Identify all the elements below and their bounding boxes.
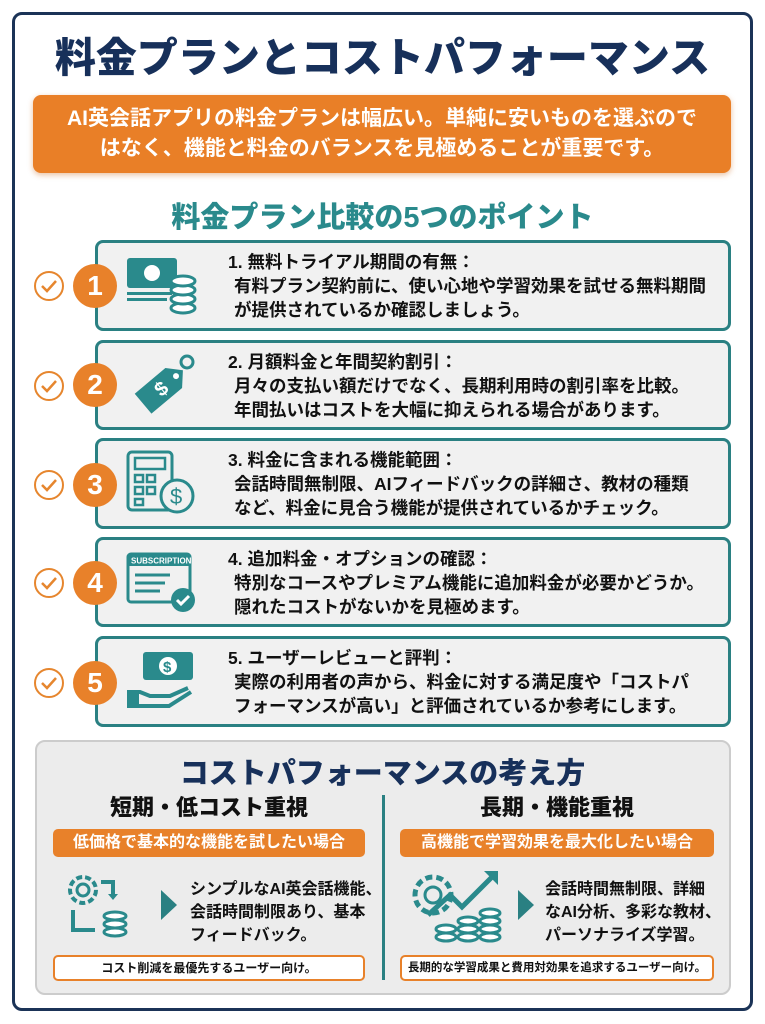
title: 料金プランとコストパフォーマンス [55, 35, 710, 81]
right note: 長期的な学習成果と費用対効果を追求するユーザー向け。 [408, 962, 706, 974]
card 5: 5. ユーザーレビューと評判： [228, 648, 457, 668]
check 1 [34, 271, 64, 301]
icon: price tag [134, 354, 194, 414]
number 2: 2 [87, 369, 103, 400]
icon: hand money [127, 652, 193, 708]
left orange label: 低価格で基本的な機能を試したい場合 [73, 834, 345, 851]
arrow [518, 890, 534, 920]
check 2 [34, 371, 64, 401]
card 1: が提供されているか確認しましょう。 [234, 300, 530, 320]
subtitle: 料金プラン比較の5つのポイント [171, 202, 594, 234]
number 5: 5 [87, 667, 103, 698]
icon: calculator: $ [170, 484, 182, 509]
card 5 [95, 636, 731, 727]
right text: パーソナライズ学習。 [545, 927, 705, 944]
icon: price tag: $ [150, 377, 173, 401]
card 5: フォーマンスが高い」と評価されているか参考にします。 [234, 696, 686, 716]
heading: cost performance: コストパフォーマンスの考え方 [180, 758, 585, 790]
left column [53, 795, 382, 981]
right text: 会話時間無制限、詳細 [545, 881, 705, 898]
card 3: 3. 料金に含まれる機能範囲： [228, 450, 457, 470]
divider [382, 795, 385, 980]
check 5 [34, 668, 64, 698]
left text: 会話時間制限あり、基本 [190, 904, 365, 921]
card 2: 年間払いはコストを大幅に抑えられる場合があります。 [234, 400, 670, 420]
check 3 [34, 470, 64, 500]
number 2 [73, 363, 117, 407]
left orange label [53, 829, 365, 857]
check 4 [34, 568, 64, 598]
icon: subscription: SUBSCRIPTION [131, 556, 192, 566]
right heading: 長期・機能重視 [480, 795, 634, 820]
icon: gear cycle [68, 875, 128, 938]
number 4 [73, 561, 117, 605]
left note: コスト削減を最優先するユーザー向け。 [101, 961, 317, 975]
intro callout: はなく、機能と料金のバランスを見極めることが重要です。 [100, 137, 664, 160]
left text: フィードバック。 [190, 927, 316, 944]
number 3: 3 [87, 469, 103, 500]
card 5: 実際の利用者の声から、料金に対する満足度や「コストパ [234, 672, 689, 692]
card 1: 1. 無料トライアル期間の有無： [228, 252, 475, 272]
intro callout: AI英会話アプリの料金プランは幅広い。単純に安いものを選ぶので [67, 107, 697, 130]
card 1 [95, 240, 731, 331]
panel: cost performance [35, 740, 731, 995]
number 5 [73, 661, 117, 705]
icon: hand money: $ [163, 659, 172, 676]
card 3: 会話時間無制限、AIフィードバックの詳細さ、教材の種類 [234, 474, 689, 494]
arrow [161, 890, 177, 920]
right text: なAI分析、多彩な教材、 [545, 904, 721, 921]
left text [190, 880, 382, 944]
number 3 [73, 463, 117, 507]
card 4: 特別なコースやプレミアム機能に追加料金が必要かどうか。 [234, 573, 704, 593]
right text [545, 880, 721, 944]
card 3 [95, 438, 731, 529]
right orange label: 高機能で学習効果を最大化したい場合 [421, 834, 693, 851]
left text: シンプルなAI英会話機能、 [190, 881, 382, 898]
icon: gear growth [412, 871, 502, 942]
card 2 [95, 340, 731, 430]
card 4: 隠れたコストがないかを見極めます。 [234, 597, 530, 617]
right orange label [400, 829, 714, 857]
number 1 [73, 264, 117, 308]
intro callout [33, 95, 731, 173]
card 3: など、料金に見合う機能が提供されているかチェック。 [234, 498, 669, 518]
number 1: 1 [87, 270, 103, 301]
right note [400, 955, 714, 981]
right column [400, 795, 721, 981]
left note [53, 955, 365, 981]
card 2: 月々の支払い額だけでなく、長期利用時の割引率を比較。 [234, 376, 689, 396]
icon: calculator [126, 450, 194, 514]
card 1: 有料プラン契約前に、使い心地や学習効果を試せる無料期間 [234, 276, 706, 296]
card 2: 2. 月額料金と年間契約割引： [228, 352, 457, 372]
icon: subscription [126, 552, 195, 612]
card 4: 4. 追加料金・オプションの確認： [228, 549, 492, 569]
left heading: 短期・低コスト重視 [110, 795, 308, 820]
number 4: 4 [87, 567, 103, 598]
card 4 [95, 537, 731, 627]
icon: money [127, 258, 196, 314]
